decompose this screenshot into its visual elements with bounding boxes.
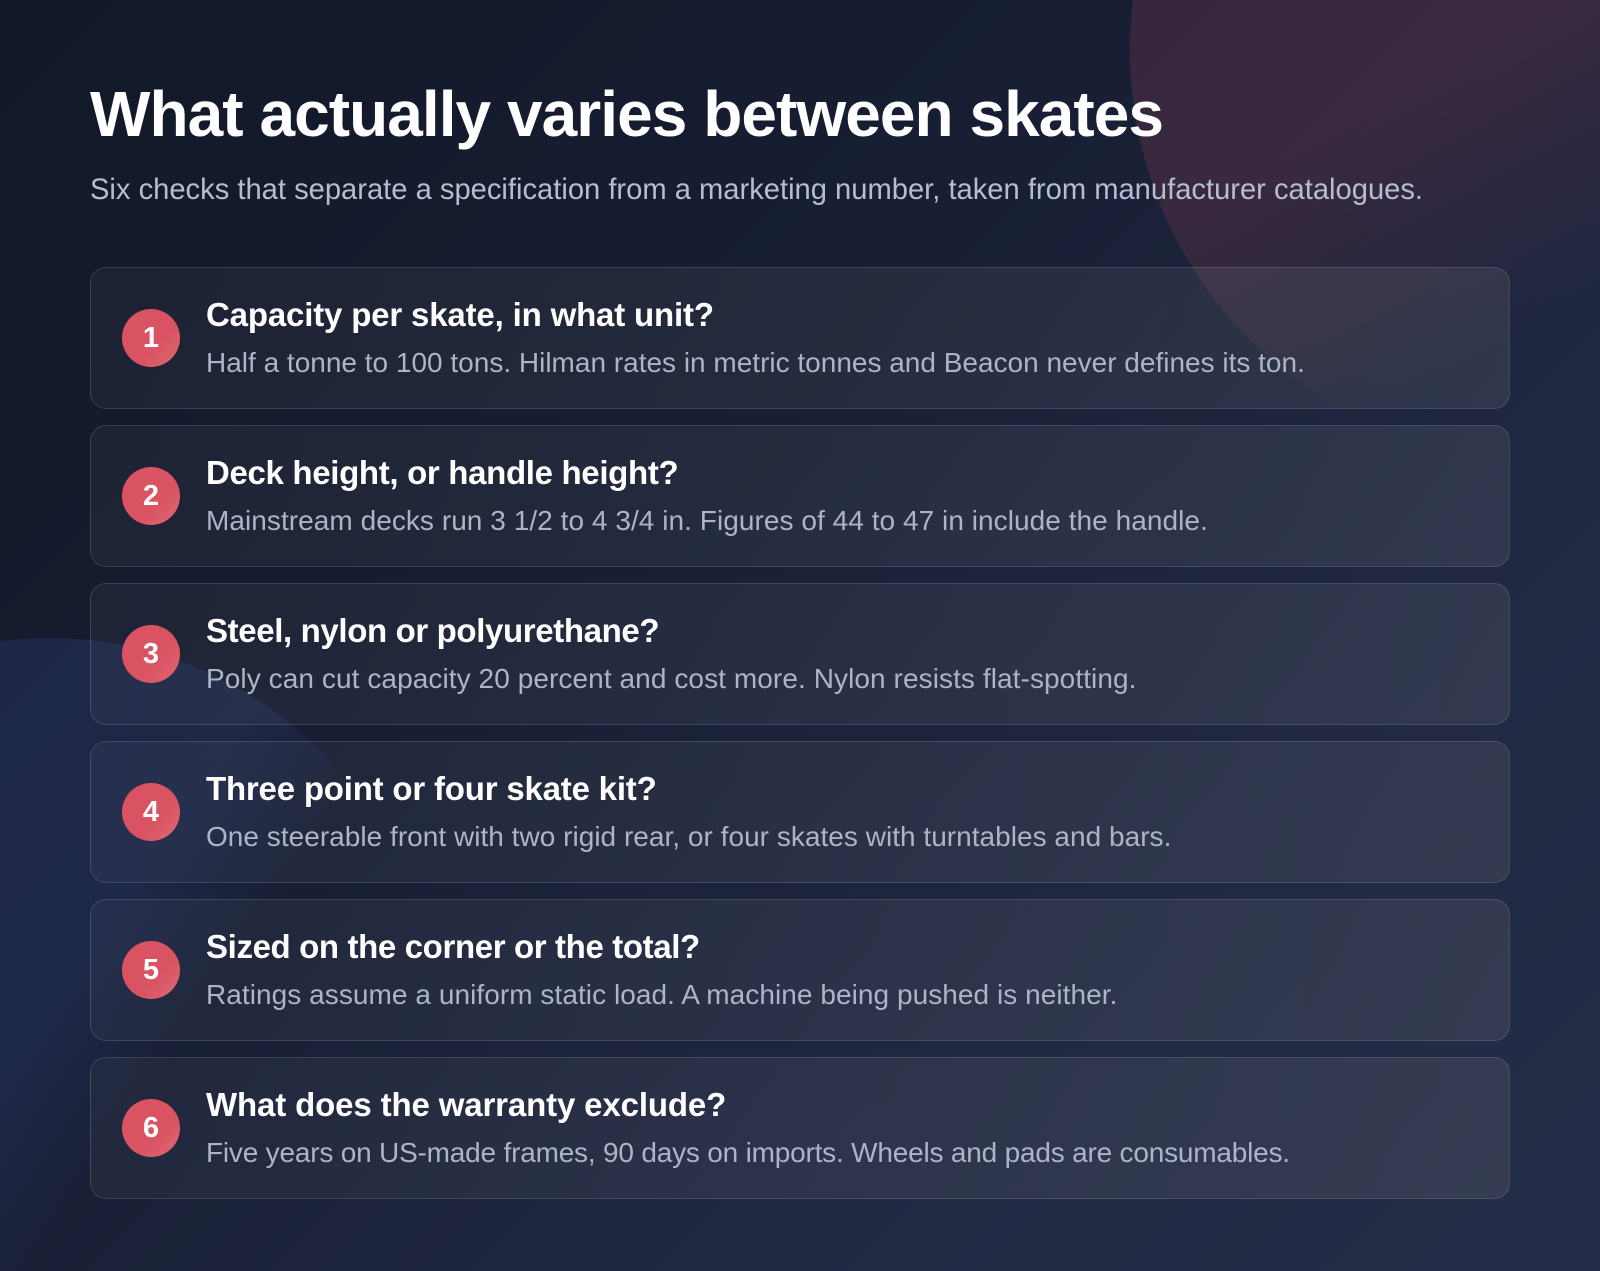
description 6: Five years on US-made frames, 90 days on imports. Wheels and pads are consumables. [206,1137,1290,1168]
description 4: One steerable front with two rigid rear, or four skates with turntables and bars. [206,821,1171,852]
description 2: Mainstream decks run 3 1/2 to 4 3/4 in. Figures of 44 to 47 in include the handle. [206,505,1208,536]
heading 2: Deck height, or handle height? [206,454,678,491]
number badge 4: 4 [143,796,159,828]
number badge 1 [122,309,180,367]
number badge 2 [122,467,180,525]
number badge 4 [122,783,180,841]
heading 1: Capacity per skate, in what unit? [206,296,714,333]
description 3: Poly can cut capacity 20 percent and cost more. Nylon resists flat-spotting. [206,663,1137,694]
number badge 5: 5 [143,954,159,986]
description 1: Half a tonne to 100 tons. Hilman rates in metric tonnes and Beacon never defines its ton. [206,347,1305,378]
panel: check 5 [90,899,1510,1041]
title: What actually varies between skates [90,78,1163,150]
panel: check 6 [90,1057,1510,1199]
number badge 6 [122,1099,180,1157]
heading 3: Steel, nylon or polyurethane? [206,612,659,649]
heading 5: Sized on the corner or the total? [206,928,700,965]
number badge 3: 3 [143,638,159,670]
panel: check 4 [90,741,1510,883]
panel: check 3 [90,583,1510,725]
panel: check 2 [90,425,1510,567]
heading 4: Three point or four skate kit? [206,770,657,807]
number badge 1: 1 [143,322,159,354]
number badge 3 [122,625,180,683]
description 5: Ratings assume a uniform static load. A machine being pushed is neither. [206,979,1117,1010]
number badge 6: 6 [143,1112,159,1144]
number badge 5 [122,941,180,999]
number badge 2: 2 [143,480,159,512]
subtitle: Six checks that separate a specification from a marketing number, taken from manufacturer catalogues. [90,174,1423,206]
heading 6: What does the warranty exclude? [206,1086,726,1123]
panel: check 1 [90,267,1510,409]
